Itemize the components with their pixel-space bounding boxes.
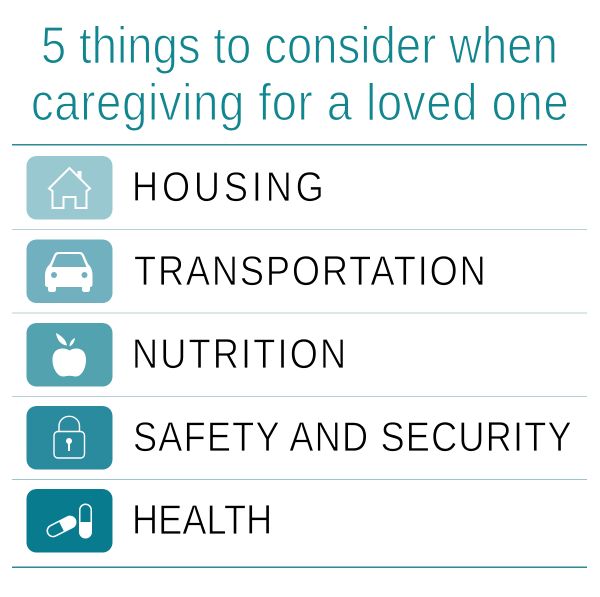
row: housing — [26, 156, 324, 220]
label: nutrition: NUTRITION — [132, 332, 346, 378]
row: health — [26, 489, 272, 552]
row: transportation — [26, 240, 486, 303]
icon: car — [26, 240, 112, 303]
title: 5 things to consider when — [41, 17, 558, 75]
title: caregiving for a loved one — [31, 74, 569, 132]
row: safety and security — [26, 406, 572, 470]
label: housing: HOUSING — [132, 165, 324, 211]
label: health: HEALTH — [132, 498, 272, 544]
icon: padlock — [26, 406, 112, 470]
label: transportation: TRANSPORTATION — [134, 249, 486, 295]
label: safety and security: SAFETY AND SECURITY — [133, 415, 572, 461]
icon: pills — [26, 489, 112, 552]
row: nutrition — [26, 323, 346, 386]
icon: house — [26, 156, 112, 220]
icon: apple — [26, 323, 112, 386]
title — [31, 17, 569, 132]
